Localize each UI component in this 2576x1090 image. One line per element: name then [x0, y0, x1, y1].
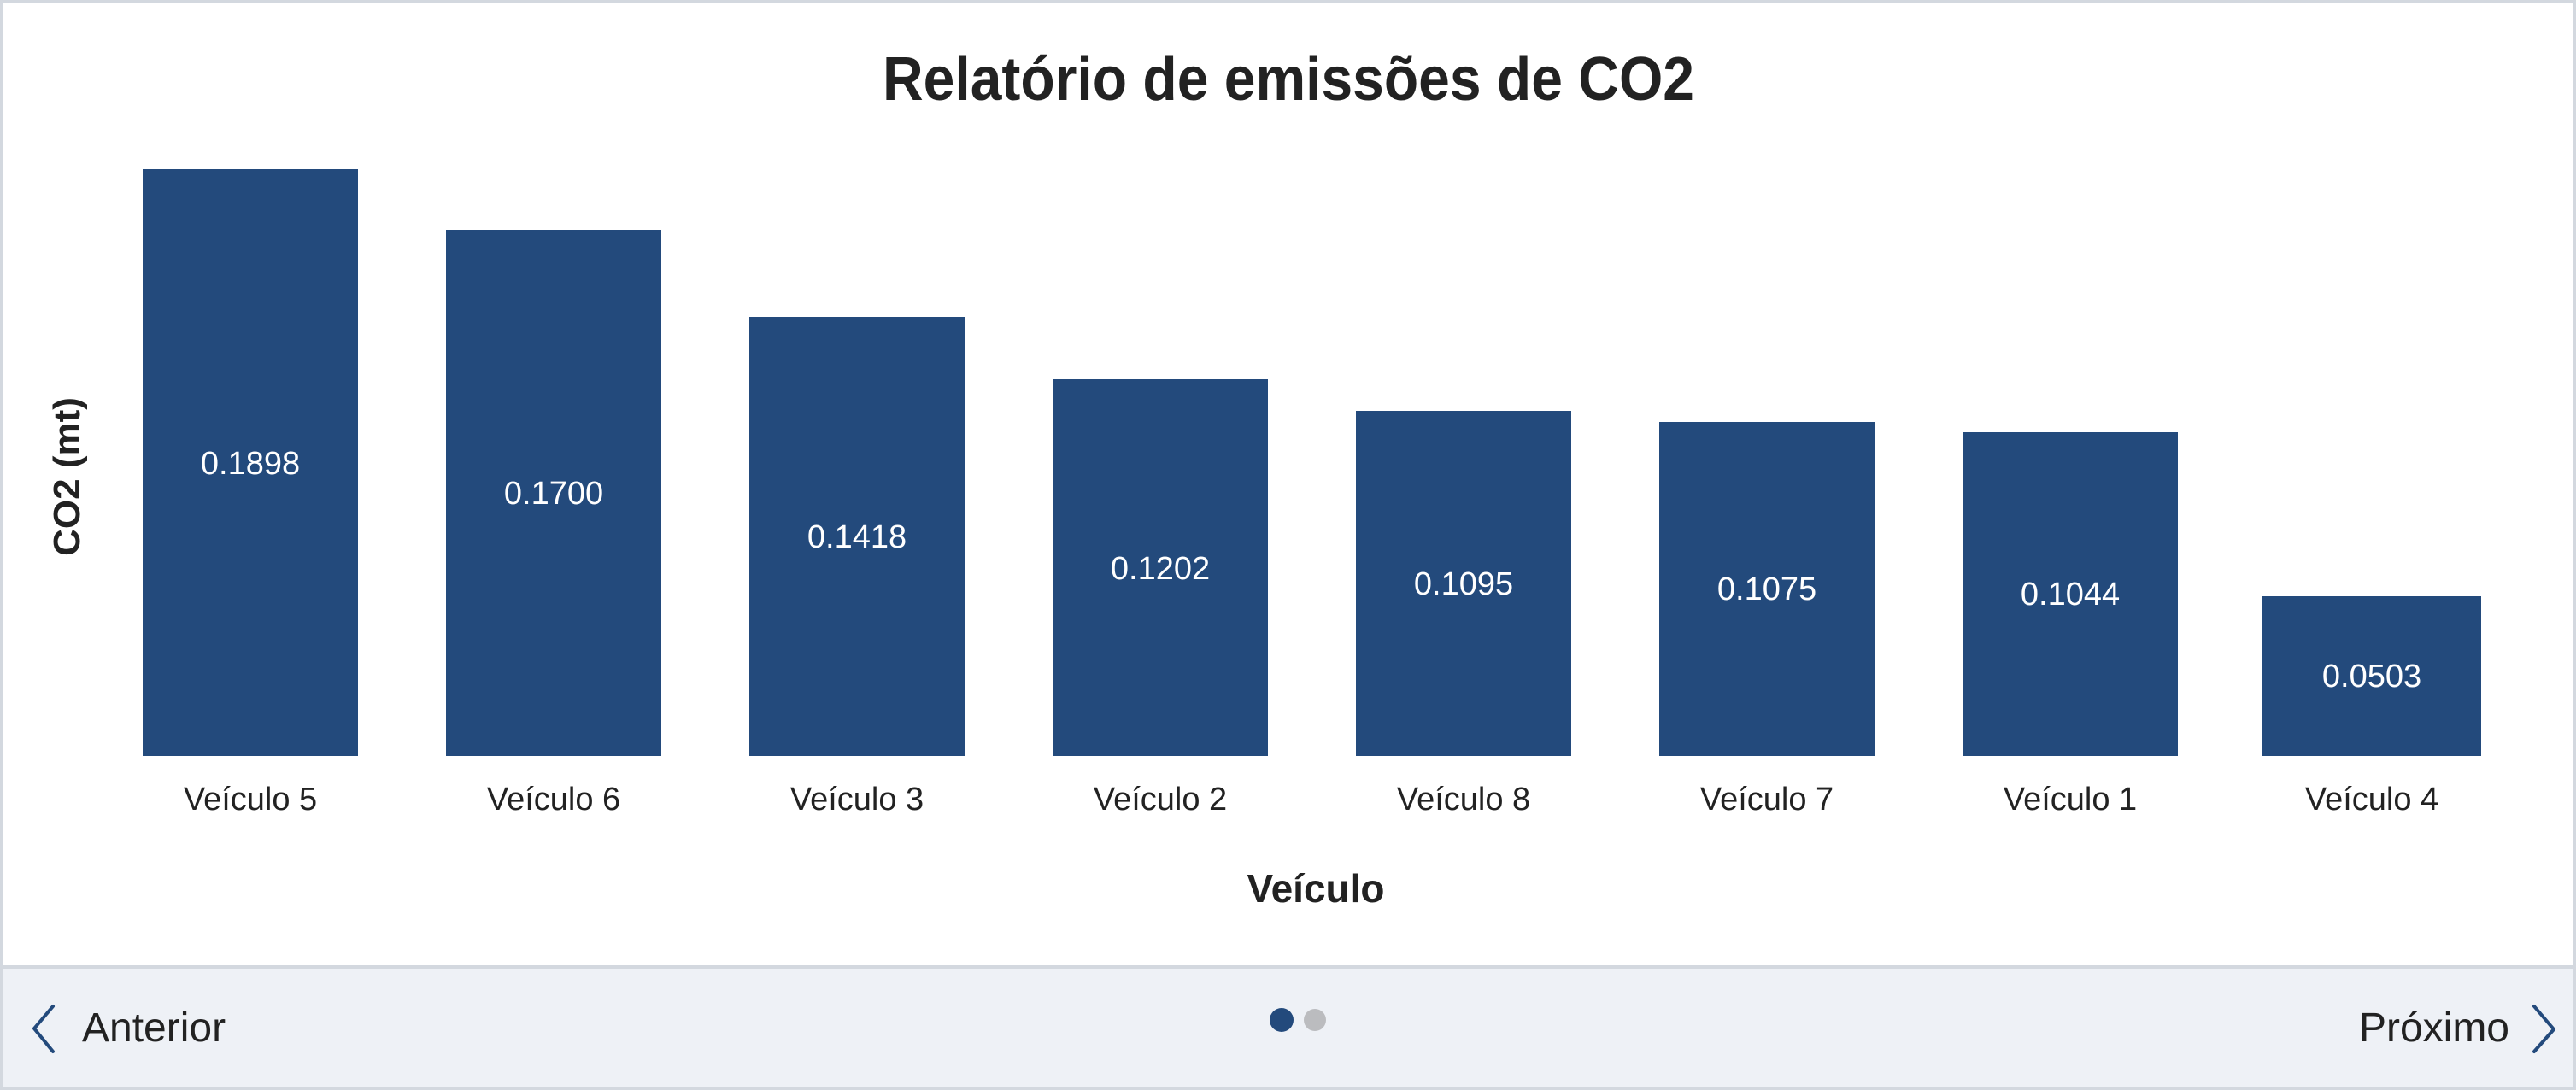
bar: Veículo 1: [1963, 432, 2178, 818]
navigation bar: [3, 967, 2573, 1087]
bar: Veículo 7: 0.1075: [1717, 571, 1816, 607]
bar: Veículo 6: 0.1700: [504, 476, 603, 512]
bar: Veículo 6: Veículo 6: [487, 782, 620, 818]
icon: left chevron: [34, 1006, 53, 1052]
bar: Veículo 5: 0.1898: [201, 446, 300, 482]
title: Relatório de emissões de CO2: [883, 45, 1694, 114]
bar: Veículo 8: 0.1095: [1414, 566, 1513, 602]
bar: Veículo 1: 0.1044: [2021, 577, 2120, 612]
previous button label: Anterior: [82, 1005, 226, 1051]
pagination dots: [1270, 1008, 1326, 1032]
bar: Veículo 6: [446, 230, 661, 818]
next button label: Próximo: [2359, 1005, 2509, 1051]
bar: Veículo 7: Veículo 7: [1700, 782, 1834, 818]
bar: Veículo 4: 0.0503: [2322, 659, 2421, 694]
bar: Veículo 2: [1053, 379, 1268, 818]
bar: Veículo 2: 0.1202: [1111, 551, 1210, 587]
bar: Veículo 5: [143, 169, 358, 818]
bar: Veículo 1: Veículo 1: [2004, 782, 2137, 818]
bar: Veículo 7: [1659, 422, 1875, 818]
bar: Veículo 4: [2262, 596, 2481, 818]
icon: right chevron: [2534, 1006, 2554, 1052]
bar: Veículo 2: Veículo 2: [1094, 782, 1227, 818]
bar: Veículo 8: [1356, 411, 1571, 818]
bar: Veículo 3: 0.1418: [807, 519, 907, 555]
bar: Veículo 4: Veículo 4: [2305, 782, 2438, 818]
x axis title: Veículo: [1247, 866, 1385, 911]
bar: Veículo 3: [749, 317, 965, 818]
bar: Veículo 3: Veículo 3: [790, 782, 924, 818]
bar: Veículo 5: Veículo 5: [184, 782, 317, 818]
bar chart: [143, 169, 2481, 818]
y axis title: CO2 (mt): [46, 397, 88, 556]
bar: Veículo 8: Veículo 8: [1397, 782, 1530, 818]
